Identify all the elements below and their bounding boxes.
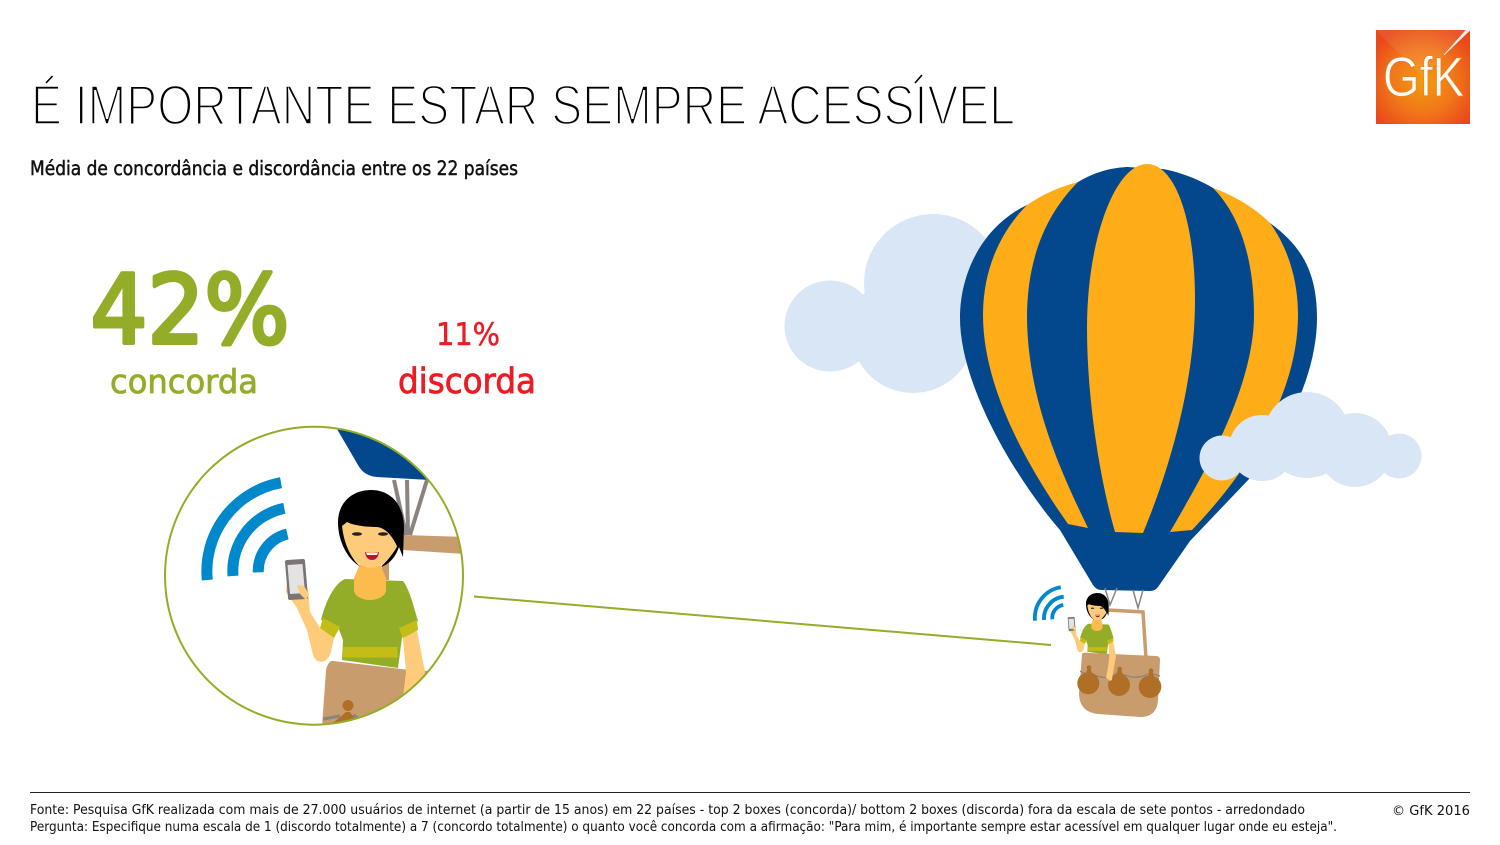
connector line — [474, 596, 1051, 645]
cloud left — [784, 214, 1002, 393]
stat: 42% concorda: concorda — [110, 362, 258, 401]
balloon basket with woman — [1068, 588, 1161, 717]
icon: wifi signal small — [1035, 587, 1064, 621]
subtitle: Média de concordância e discordância entre os 22 países — [30, 157, 518, 180]
stat: 11% discorda — [398, 317, 536, 402]
GfK logo — [1376, 30, 1470, 124]
title: É IMPORTANTE ESTAR SEMPRE ACESSÍVEL — [31, 74, 1015, 138]
footer source note — [30, 803, 1337, 835]
hot-air balloon — [960, 164, 1317, 591]
GfK logo: GfK — [1383, 45, 1464, 108]
magnified circle: woman with phone — [165, 420, 465, 745]
cloud right — [1200, 392, 1422, 487]
stat: 42% concorda: 42% — [90, 256, 290, 366]
copyright: © GfK 2016 — [1392, 804, 1470, 819]
stat: 11% discorda: discorda — [398, 362, 536, 402]
icon: wifi signal large — [207, 483, 287, 580]
footer source note: Pergunta: Especifique numa escala de 1 (discordo totalmente) a 7 (concordo totalmente) o quanto você concorda com a afirmação: "Para mim, é importante sempre estar acessível em qualquer lugar onde eu esteja". — [30, 820, 1337, 835]
stat: 11% discorda: 11% — [436, 317, 500, 353]
footer source note: Fonte: Pesquisa GfK realizada com mais de 27.000 usuários de internet (a partir de 15 anos) em 22 países - top 2 boxes (concorda)/ bottom 2 boxes (discorda) fora da escala de sete pontos - arredondado — [30, 803, 1305, 818]
